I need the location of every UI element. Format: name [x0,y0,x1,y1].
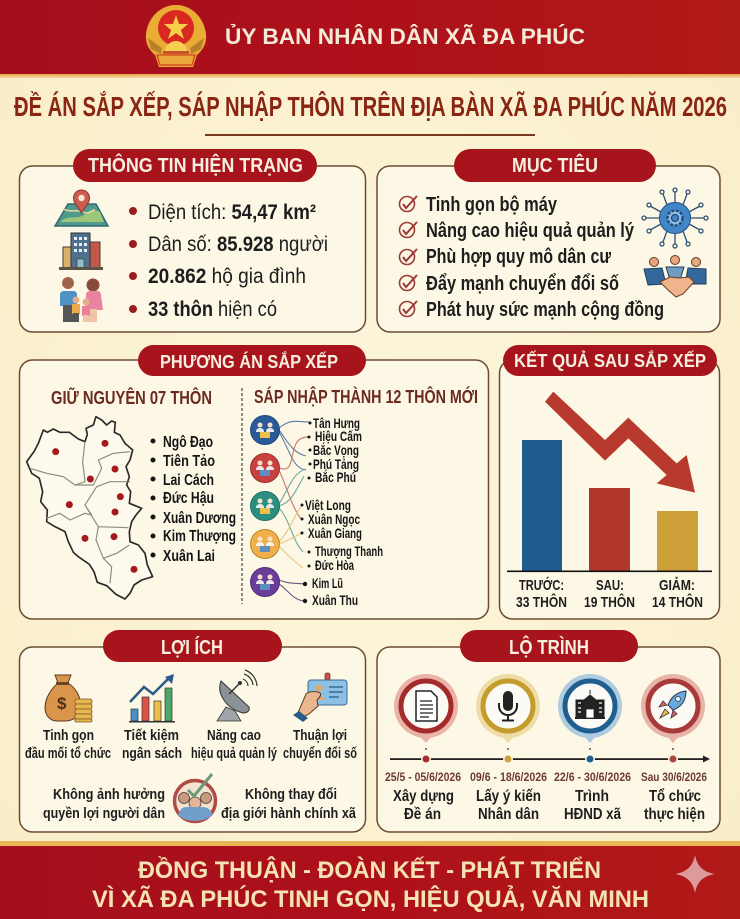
status list: 20.862 hộ gia đình [148,265,306,288]
benefits captions: Không thay đổi [245,786,337,803]
bar labels: SAU: [596,577,624,594]
arrow: decreasing trend [545,392,695,493]
benefits captions: Không ảnh hưởng [53,786,165,803]
list: merged villages: Xuân Giang [308,525,362,541]
list: merged villages: Hiệu Cấm [315,428,362,444]
status list [129,201,328,321]
icon: id card in hand [293,673,347,722]
status list: Diện tích: 54,47 km² [148,201,316,224]
heading: lợi ích [103,630,282,662]
icon: money bag: $ [57,694,67,713]
icon: map with pin [55,190,108,226]
icon: buildings [59,233,103,270]
subheading: giữ nguyên: GIỮ NGUYÊN 07 THÔN [51,387,212,408]
list: merged villages: Kim Lũ [312,575,343,591]
benefits captions: Năng cao [207,727,261,744]
list: retained villages: Xuân Dương [163,510,236,527]
benefits captions: ngân sách [122,745,182,762]
panel: thông tin hiện trạng [20,149,366,332]
list: retained villages: Ngô Đạo [163,434,213,451]
list: retained villages [150,434,236,565]
heading: mục tiêu: MỤC TIÊU [512,153,598,177]
list: merged villages: Bắc Phú [315,468,356,485]
timeline dates [385,770,707,784]
merge group icons [250,416,280,596]
footer slogan: VÌ XÃ ĐA PHÚC TINH GỌN, HIỆU QUẢ, VĂN MINH [92,884,649,913]
benefits captions: chuyển đổi số [283,745,357,762]
bar labels: 19 THÔN [584,593,635,611]
step 4 [641,674,705,764]
bar labels [516,576,703,611]
list: merged villages: Xuân Thu [312,592,358,608]
list: merged villages: Xuân Ngọc [308,511,360,527]
timeline step labels: Xây dựng [393,788,454,805]
list: merged villages: Đức Hòa [315,557,354,573]
heading: lợi ích: LỢI ÍCH [161,636,223,659]
list: retained villages: Kim Thượng [163,528,236,545]
panel: lợi ích [20,630,366,832]
timeline step labels: thực hiện [644,806,705,823]
timeline step labels [393,787,705,823]
icon: satellite dish [217,670,257,721]
timeline step labels: Nhân dân [478,806,539,823]
header band [0,0,740,78]
panel: phương án sắp xếp [20,345,488,619]
heading: lộ trình: LỘ TRÌNH [509,635,589,659]
list: merged villages: Thượng Thanh [315,543,383,559]
timeline dates: Sau 30/6/2026 [641,770,707,784]
benefits captions: Tiết kiệm [124,727,179,744]
icon: growth chart [129,674,175,722]
objectives checklist: Phát huy sức mạnh cộng đồng [426,298,664,321]
timeline step labels: Đề án [404,806,441,823]
map of commune [27,417,153,599]
list: merged villages: Phú Tảng [313,456,359,472]
timeline step labels: HĐND xã [564,806,621,823]
bar labels: TRƯỚC: [519,576,564,594]
timeline step labels: Tổ chức [649,787,701,805]
timeline arrow [390,756,710,762]
bar labels: 14 THÔN [652,593,703,611]
heading: mục tiêu [454,149,656,182]
objectives checklist: Nâng cao hiệu quả quản lý [426,219,634,242]
objectives checklist: Tinh gọn bộ máy [426,193,557,216]
timeline step labels: Trình [575,788,609,805]
heading: phương án sắp xếp [138,345,366,376]
list: retained villages: Tiên Tảo [163,453,215,470]
objectives checklist: Phù hợp quy mô dân cư [426,245,611,268]
benefits captions: đầu mối tổ chức [25,745,111,762]
benefits captions: hiệu quả quản lý [191,745,277,762]
icon: handshake [644,256,706,297]
benefits captions: Tinh gọn [43,727,94,744]
timeline dates: 22/6 - 30/6/2026 [554,770,631,784]
list: merged villages: Tân Hưng [313,415,360,431]
list: merged villages: Bắc Vọng [313,441,359,458]
icon: people with check [174,774,216,822]
objectives checklist: Đẩy mạnh chuyển đổi số [426,272,619,295]
panel: lộ trình [377,630,720,832]
panel: mục tiêu [377,149,720,332]
benefits captions: địa giới hành chính xã [221,805,357,822]
heading: thông tin hiện trạng [73,149,317,182]
heading: thông tin hiện trạng: THÔNG TIN HIỆN TRẠNG [88,153,303,177]
objectives checklist [400,193,664,321]
icon: digital gear [642,188,708,248]
step 3 [558,674,622,764]
footer slogan [92,856,649,913]
icon: sparkle [675,855,715,893]
heading: kết quả [503,345,717,376]
heading: phương án sắp xếp: PHƯƠNG ÁN SẮP XẾP [160,351,338,372]
benefits captions: Thuận lợi [293,727,347,744]
icon: national emblem [146,5,206,67]
panel: kết quả sau sắp xếp [500,345,720,619]
list: merged villages [300,415,383,608]
heading: kết quả: KẾT QUẢ SAU SẮP XẾP [514,350,706,371]
connector lines [279,421,310,601]
subheading: sáp nhập: SÁP NHẬP THÀNH 12 THÔN MỚI [254,386,478,407]
icon: family [60,277,103,322]
bar labels: GIẢM: [659,577,695,594]
bar labels: 33 THÔN [516,593,567,611]
header title: ỦY BAN NHÂN DÂN XÃ ĐA PHÚC [225,24,585,49]
footer slogan: ĐỒNG THUẬN - ĐOÀN KẾT - PHÁT TRIỂN [138,856,601,884]
timeline dates: 25/5 - 05/6/2026 [385,770,461,784]
status list: 33 thôn hiện có [148,298,277,321]
list: merged villages: Việt Long [305,497,351,513]
list: retained villages: Xuân Lai [163,548,215,565]
step 2 [476,674,540,764]
list: retained villages: Đức Hậu [163,490,214,507]
heading: lộ trình [460,630,638,662]
footer band [0,841,740,919]
benefits captions [25,727,357,822]
bar chart [507,440,712,572]
icon: money bag [45,675,92,722]
step 1 [394,674,458,764]
timeline step labels: Lấy ý kiến [476,788,541,805]
list: retained villages: Lai Cách [163,472,214,489]
timeline dates: 09/6 - 18/6/2026 [470,770,547,784]
status list: Dân số: 85.928 người [148,233,328,256]
benefits captions: quyền lợi người dân [43,805,165,822]
